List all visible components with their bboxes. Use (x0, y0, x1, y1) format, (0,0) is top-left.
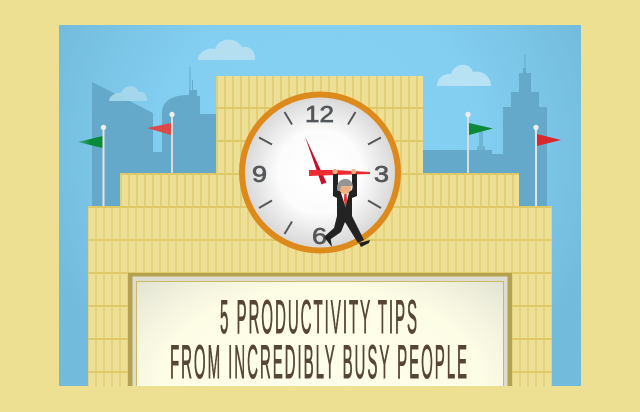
clock tick marks (259, 112, 381, 234)
title text (170, 290, 469, 388)
hands (332, 169, 338, 174)
flag: right green (465, 112, 493, 175)
flag: far right red (533, 125, 561, 208)
shoes (324, 235, 370, 247)
sky background (59, 25, 581, 386)
suit and arms (333, 174, 357, 217)
head (339, 182, 351, 194)
cloud: left (109, 86, 147, 101)
cloud: right (437, 65, 491, 86)
minute hand (309, 170, 370, 176)
clock face (242, 94, 398, 250)
clock numerals (252, 101, 389, 249)
clock numerals: 9 (252, 161, 267, 187)
legs (325, 216, 364, 243)
skyline: left buildings (92, 67, 216, 207)
hour hand (305, 136, 326, 184)
clock numerals: 6 (312, 223, 327, 249)
title plaque (128, 273, 512, 388)
businessman hanging from clock hand (324, 169, 370, 247)
golden building (88, 76, 552, 386)
cloud: top centre (198, 40, 255, 60)
hair (337, 179, 353, 191)
skyline: right buildings (423, 54, 547, 207)
flag: far left green (78, 125, 106, 208)
shirt and tie (341, 193, 349, 207)
clock numerals: 3 (374, 161, 389, 187)
clock (242, 94, 398, 250)
flag: left red (147, 112, 175, 175)
clock numerals: 12 (305, 101, 334, 127)
bottom page margin (0, 386, 640, 412)
